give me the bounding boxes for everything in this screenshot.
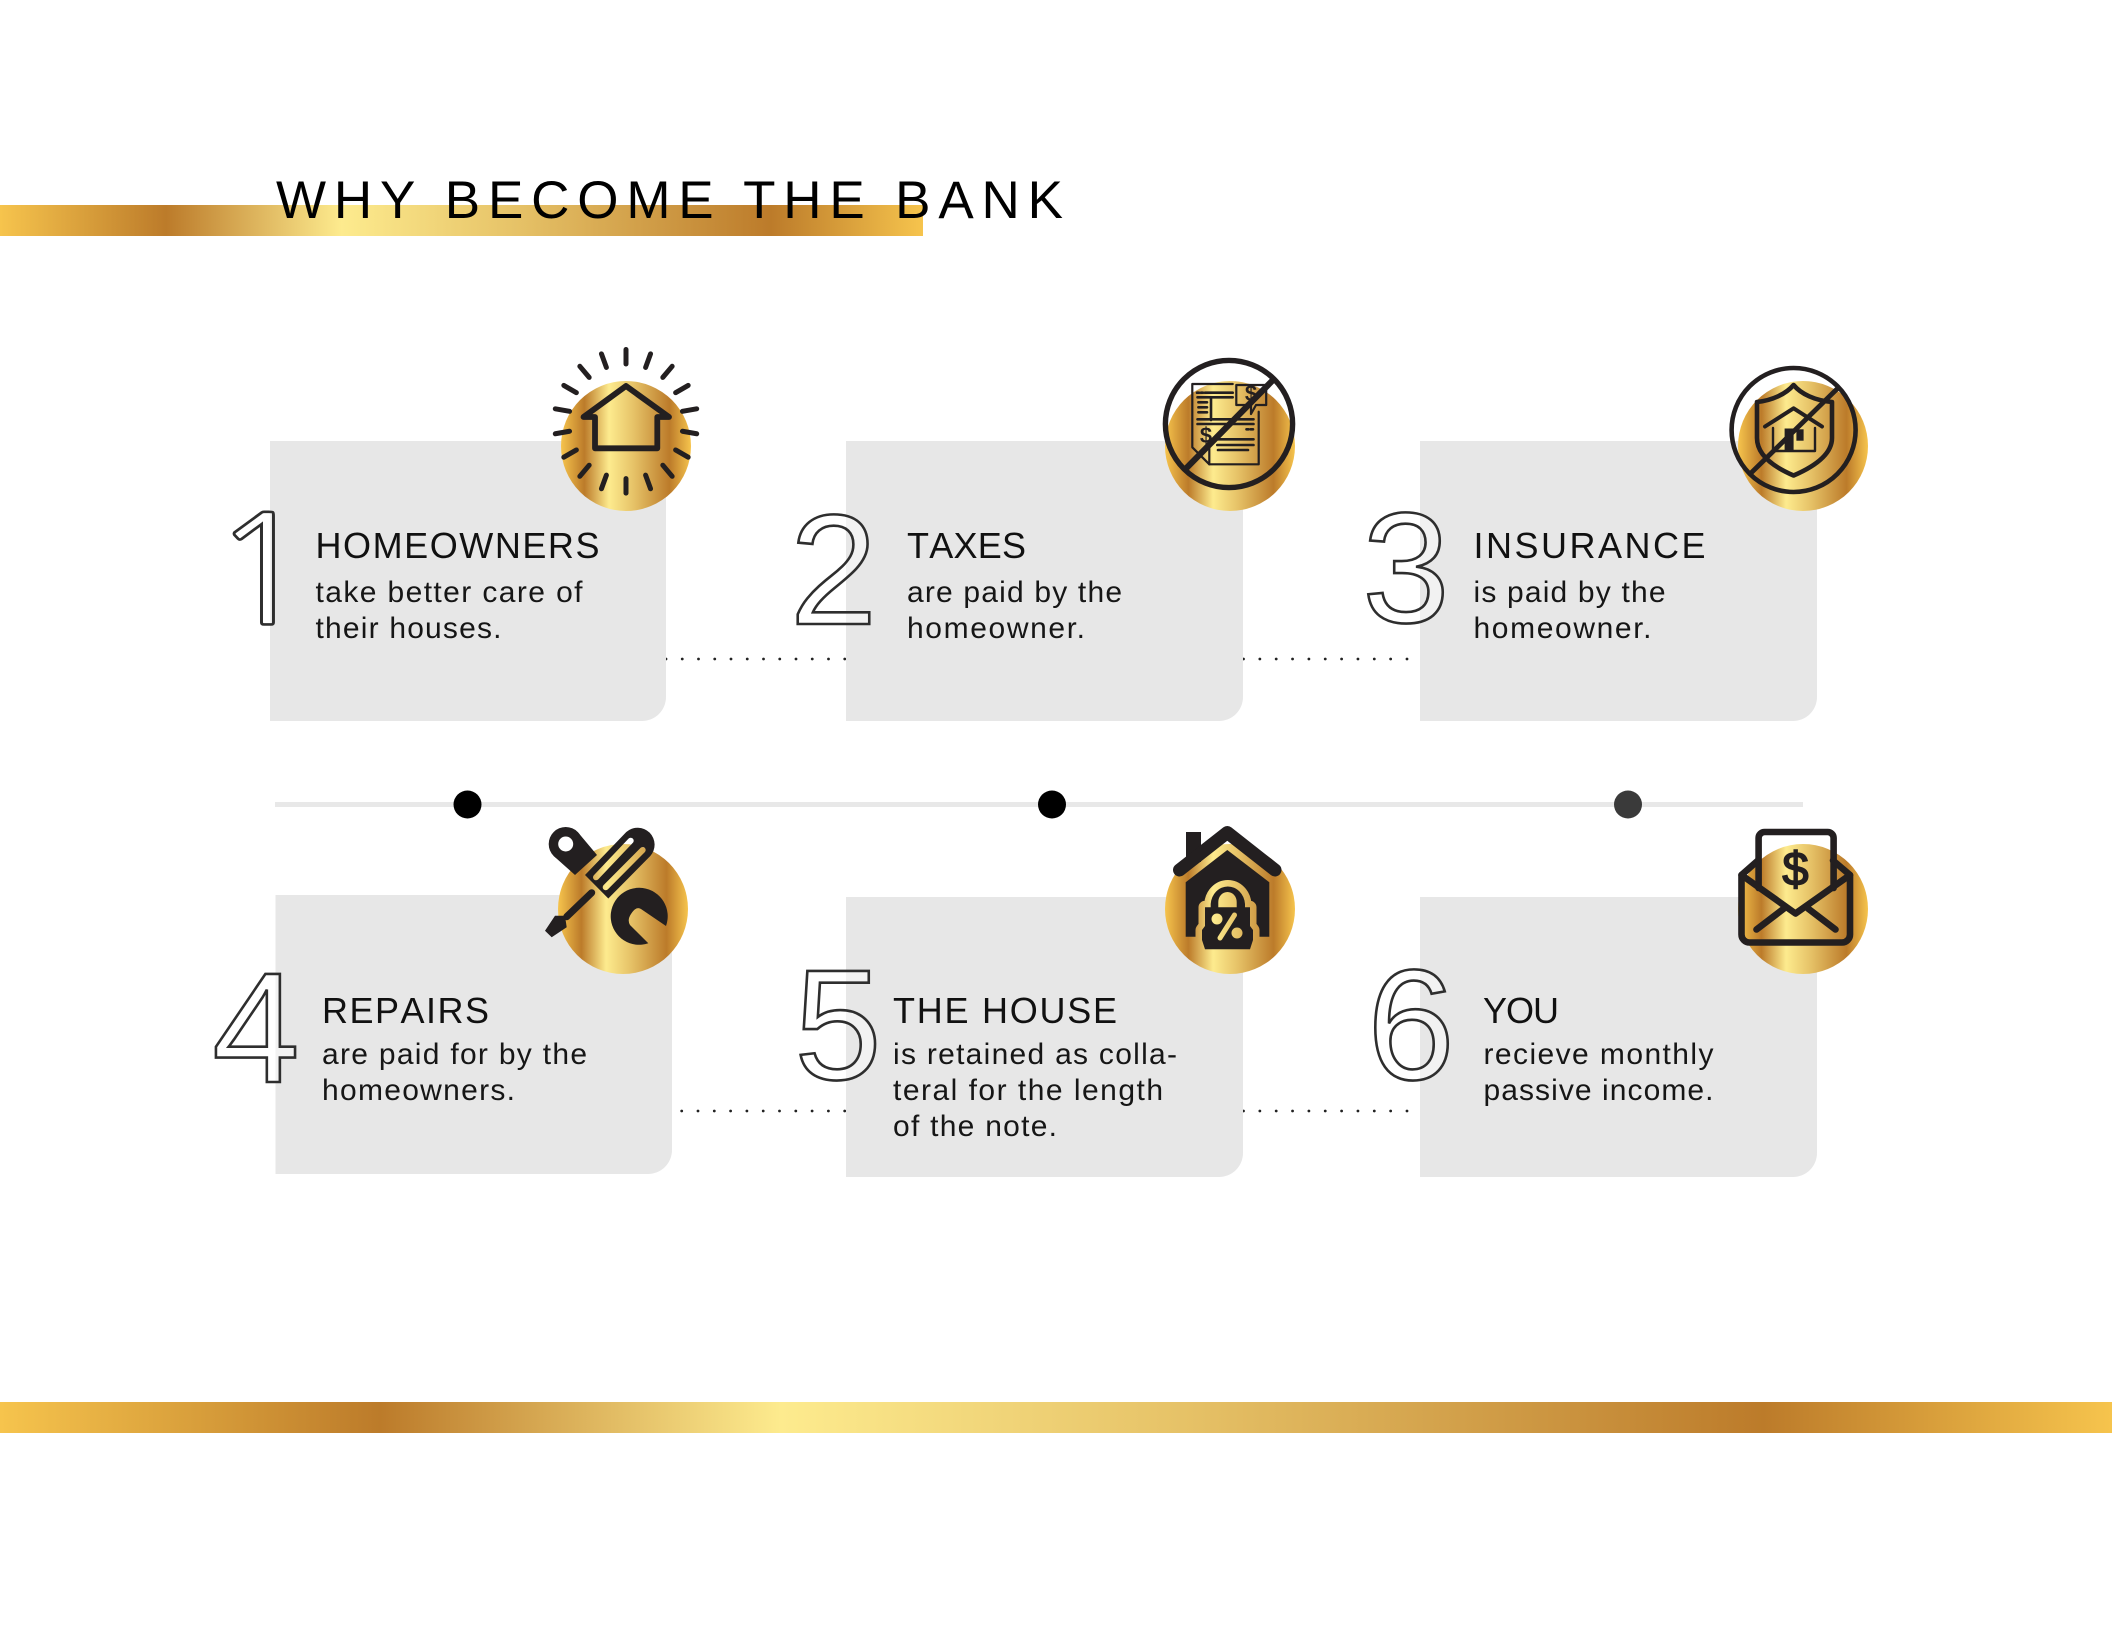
icon: house with rays [555, 350, 697, 511]
heading: THE HOUSE [893, 990, 1117, 1031]
panel: taxes [790, 360, 1295, 721]
icon: crossed-out tax documents: $ [1200, 423, 1212, 448]
body text [322, 1038, 587, 1107]
body text: of the note. [893, 1110, 1057, 1143]
body text: teral for the length [893, 1074, 1163, 1107]
number 6: 6 [1367, 938, 1455, 1113]
number 2: 2 [790, 483, 877, 658]
icon: house with percent lock [1165, 832, 1295, 974]
body text: homeowner. [1474, 612, 1652, 645]
body text: take better care of [316, 576, 583, 609]
body text [907, 576, 1122, 645]
body text: is retained as colla- [893, 1038, 1177, 1071]
body text: their houses. [316, 612, 502, 645]
number 3: 3 [1362, 481, 1450, 656]
body text: is paid by the [1474, 576, 1666, 609]
icon: open envelope with dollar letter: $ [1782, 842, 1808, 895]
heading: INSURANCE [1474, 525, 1706, 566]
body text [1474, 576, 1666, 645]
icon: crossed-out shield with house [1732, 368, 1868, 511]
icon: crossed-out tax documents: $ [1245, 381, 1257, 406]
panel: you [1367, 832, 1868, 1177]
top gold bar [0, 205, 923, 236]
title: WHY BECOME THE BANK [276, 171, 1063, 230]
number 5: 5 [794, 938, 882, 1113]
body text: passive income. [1484, 1074, 1714, 1107]
body text: homeowners. [322, 1074, 515, 1107]
heading: REPAIRS [322, 990, 489, 1031]
bottom gold bar [0, 1402, 2112, 1433]
icon: crossed-out tax documents [1165, 360, 1295, 511]
body text [316, 576, 583, 645]
body text [893, 1038, 1177, 1143]
icon: open envelope with dollar letter [1738, 832, 1868, 974]
number 4: 4 [212, 941, 300, 1116]
body text [1484, 1038, 1714, 1107]
number 1: 1 [209, 496, 315, 646]
heading: TAXES [907, 525, 1026, 566]
timeline divider with dots [275, 790, 1803, 818]
body text: are paid for by the [322, 1038, 587, 1071]
icon: screwdriver and wrench [545, 827, 688, 974]
body text: recieve monthly [1484, 1038, 1714, 1071]
heading: HOMEOWNERS [316, 525, 600, 566]
panel: homeowners [209, 350, 697, 721]
body text: homeowner. [907, 612, 1085, 645]
body text: are paid by the [907, 576, 1122, 609]
panel: insurance [1362, 368, 1868, 721]
heading: YOU [1483, 990, 1559, 1031]
panel: the house [794, 832, 1295, 1177]
dotted connectors [666, 659, 1409, 1111]
panel: repairs [212, 827, 688, 1174]
